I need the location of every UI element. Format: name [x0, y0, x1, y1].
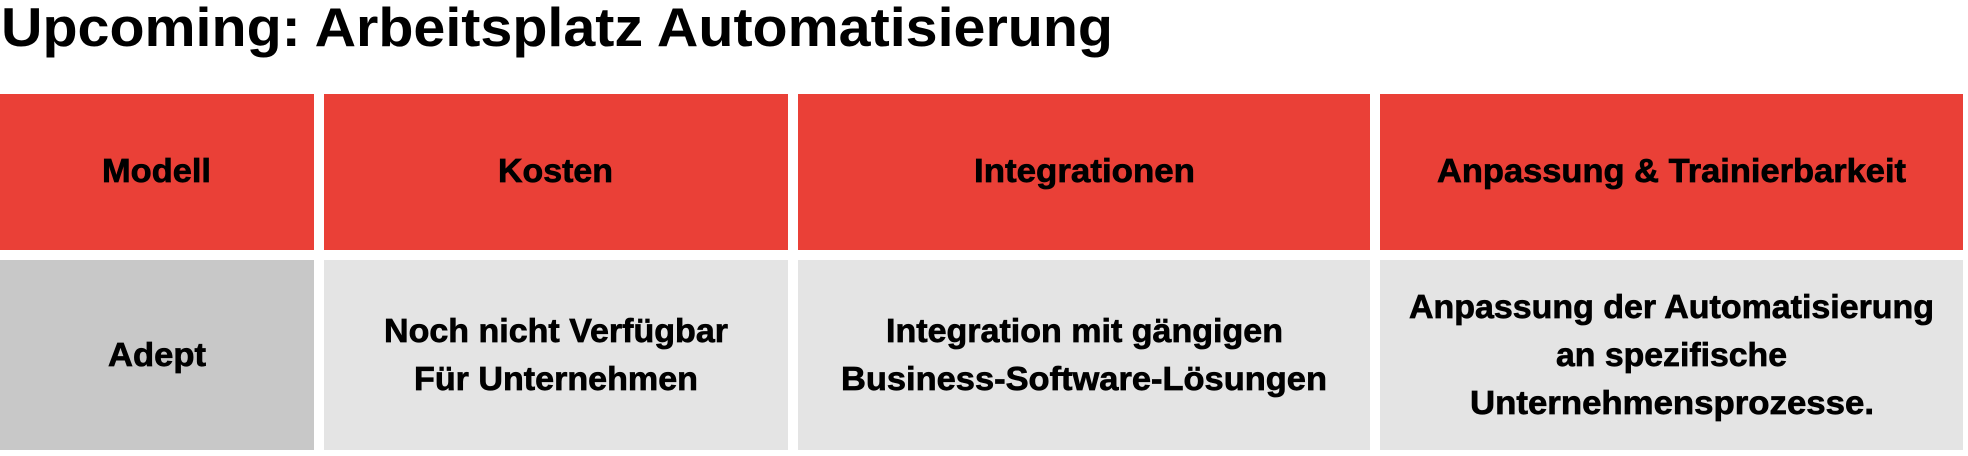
header cell: Anpassung und Trainierbarkeit: [1380, 94, 1963, 250]
header cell: Kosten: Kosten: [498, 152, 613, 189]
row cell: Integrationen value: Business-Software-Lösungen: [841, 360, 1327, 397]
row cell: Anpassung value: an spezifische: [1556, 336, 1787, 373]
row cell: Integrationen value: [798, 260, 1370, 450]
row cell: Anpassung value: Unternehmensprozesse.: [1470, 384, 1874, 421]
row cell: Adept: [0, 260, 314, 450]
header cell: Integrationen: Integrationen: [974, 152, 1195, 189]
table: [0, 94, 1963, 450]
row cell: Adept: Adept: [108, 336, 206, 373]
header cell: Modell: Modell: [102, 152, 211, 189]
row cell: Anpassung value: [1380, 260, 1963, 450]
row cell: Kosten value: [324, 260, 788, 450]
row cell: Kosten value: Für Unternehmen: [414, 360, 698, 397]
header cell: Anpassung und Trainierbarkeit: Anpassung & Trainierbarkeit: [1437, 152, 1906, 189]
row cell: Kosten value: Noch nicht Verfügbar: [384, 312, 728, 349]
header cell: Modell: [0, 94, 314, 250]
row cell: Anpassung value: Anpassung der Automatisierung: [1409, 288, 1934, 325]
header cell: Kosten: [324, 94, 788, 250]
row cell: Integrationen value: Integration mit gängigen: [886, 312, 1283, 349]
header cell: Integrationen: [798, 94, 1370, 250]
